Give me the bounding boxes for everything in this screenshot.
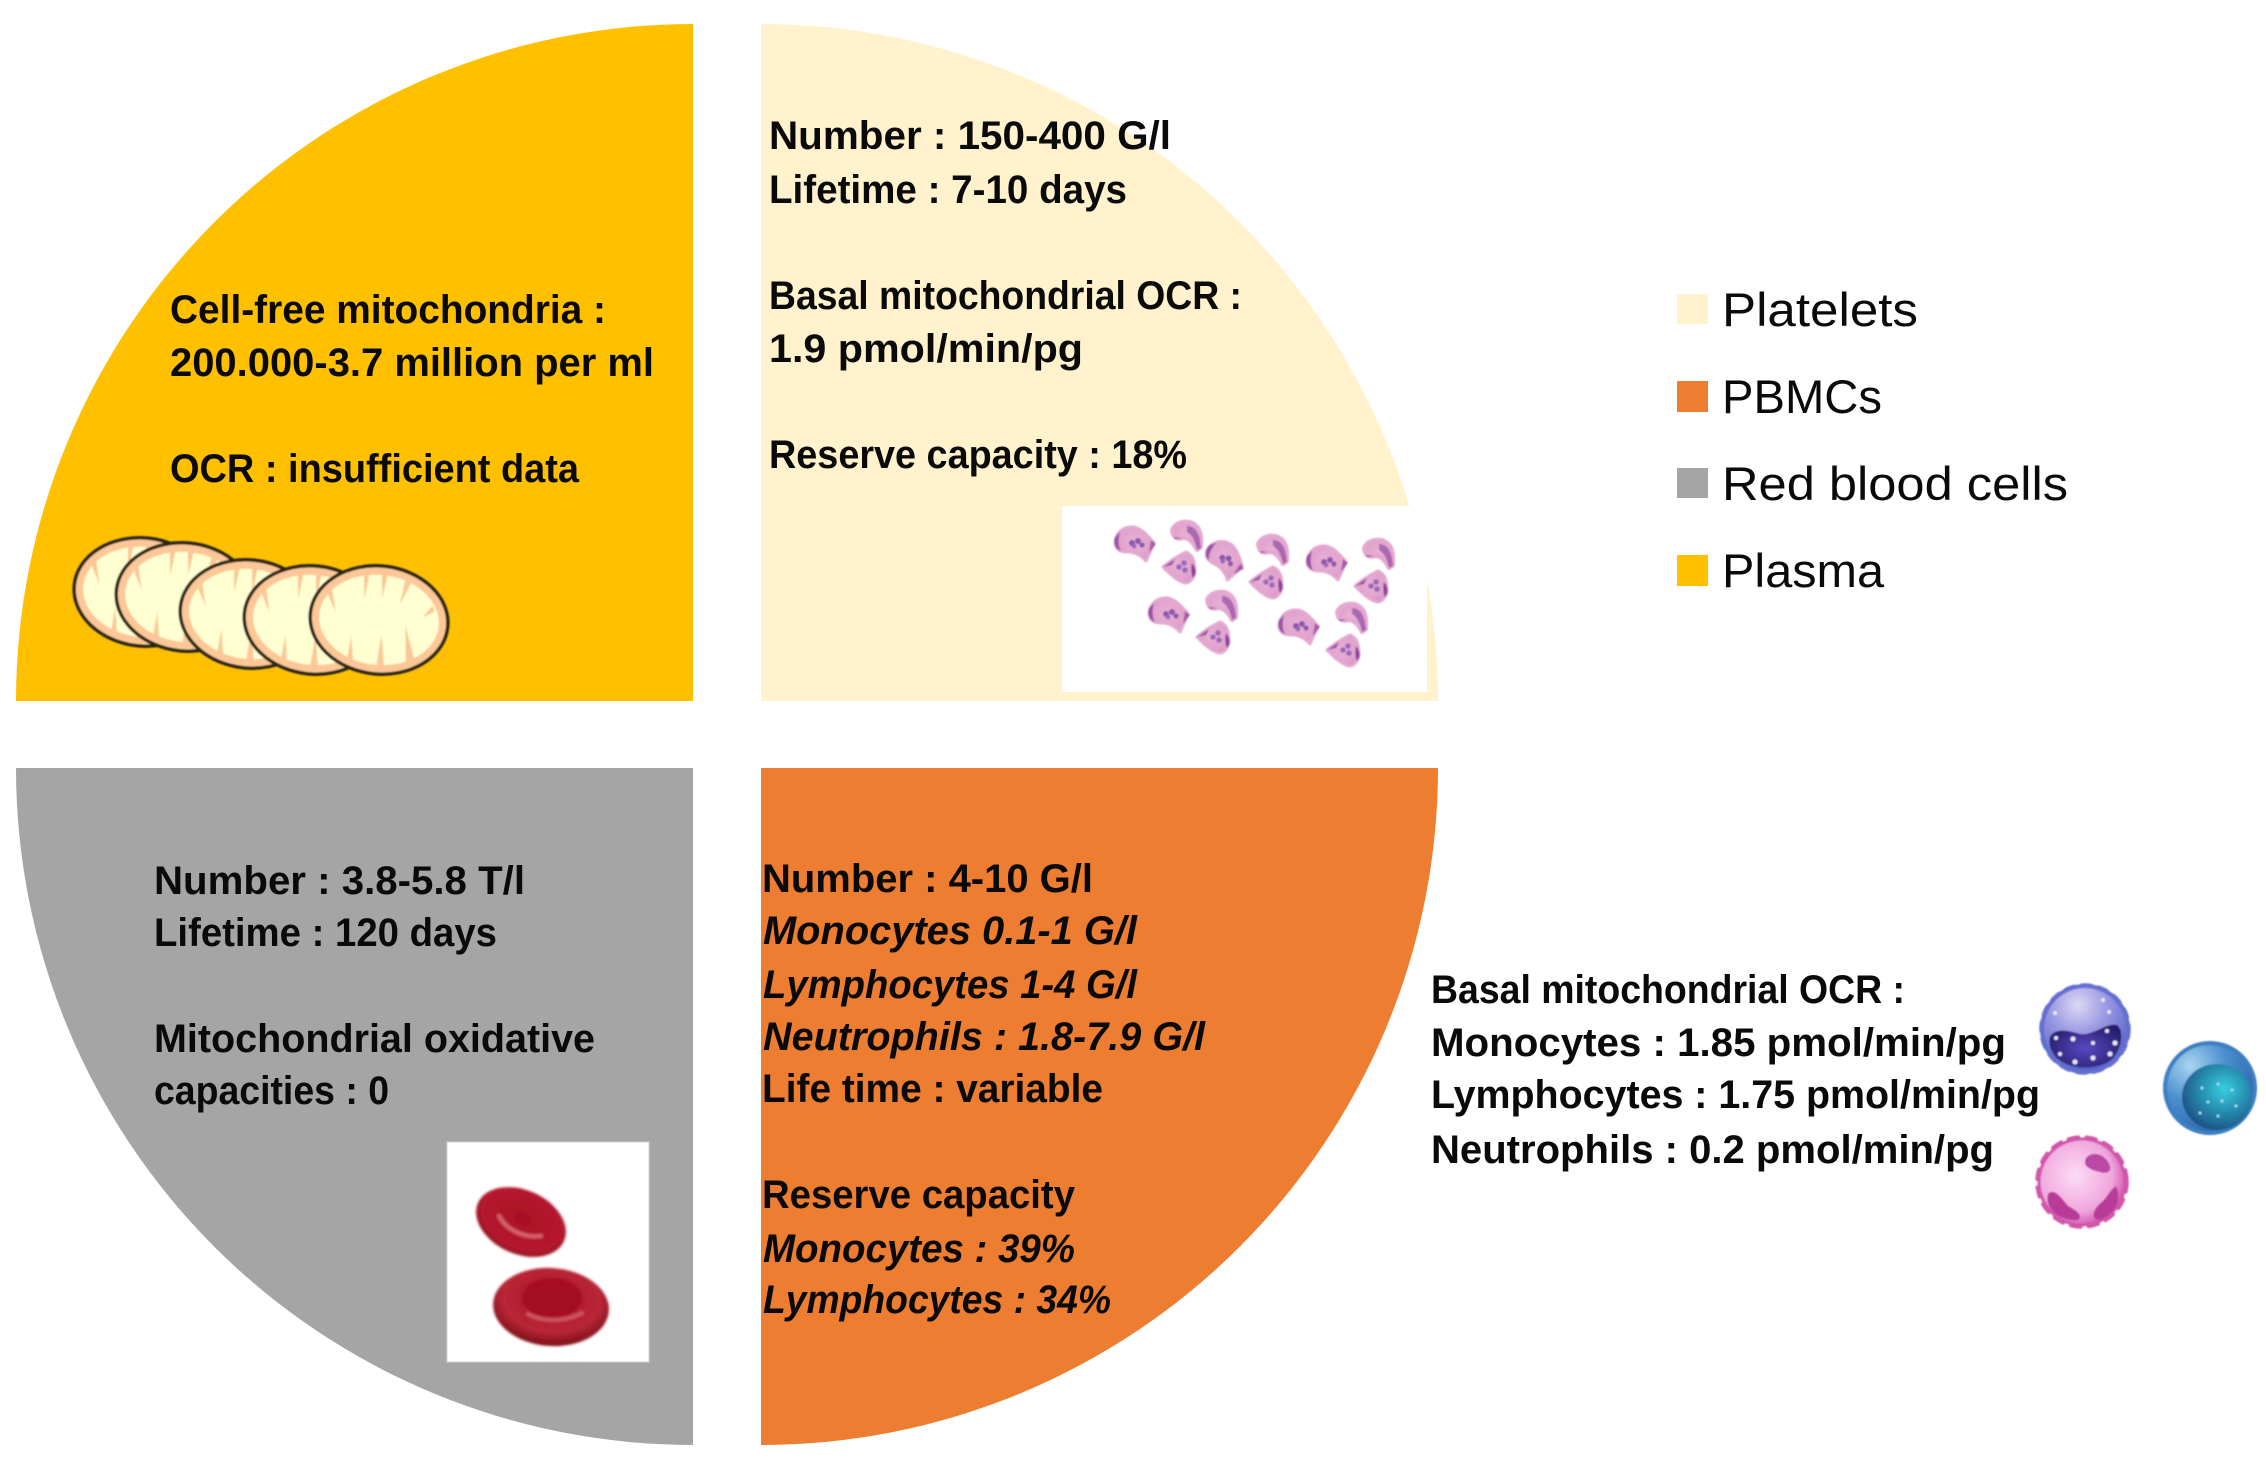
legend item: PBMCs: PBMCs bbox=[1722, 370, 1882, 423]
PBMCs text: Neutrophils : 1.8-7.9 G/l bbox=[763, 1015, 1206, 1059]
panel: PBMCs quadrant bbox=[761, 768, 1438, 1445]
red blood cells text bbox=[154, 859, 595, 1113]
icon: red blood cells picture bbox=[447, 1142, 649, 1362]
panel: plasma quadrant bbox=[16, 24, 693, 701]
callout: PBMC basal OCR text: Lymphocytes : 1.75 pmol/min/pg bbox=[1431, 1073, 2040, 1117]
icon: monocyte bbox=[2041, 985, 2129, 1073]
PBMCs text: Lymphocytes 1-4 G/l bbox=[763, 963, 1138, 1007]
platelets text: Reserve capacity : 18% bbox=[769, 433, 1187, 477]
legend item: plasma: Plasma bbox=[1722, 544, 1885, 597]
icon: platelets picture bbox=[1062, 506, 1427, 692]
plasma quarter disc bbox=[16, 24, 693, 701]
platelets text: Basal mitochondrial OCR : bbox=[769, 274, 1242, 318]
red blood cells text: Mitochondrial oxidative bbox=[154, 1017, 595, 1061]
PBMCs text: Reserve capacity bbox=[762, 1173, 1076, 1217]
platelets text: Number : 150-400 G/l bbox=[769, 114, 1171, 158]
legend item: platelets: Platelets bbox=[1722, 283, 1918, 336]
PBMCs quarter disc bbox=[761, 768, 1438, 1445]
plasma text: Cell-free mitochondria : bbox=[170, 288, 606, 332]
legend bbox=[1677, 283, 2068, 597]
red blood cells quarter disc bbox=[16, 768, 693, 1445]
red blood cells text: Number : 3.8-5.8 T/l bbox=[154, 859, 525, 903]
platelets text bbox=[769, 114, 1242, 477]
panel: red blood cells quadrant bbox=[16, 768, 693, 1445]
panel: platelets quadrant bbox=[761, 24, 1438, 701]
callout: PBMC basal OCR text: Neutrophils : 0.2 pmol/min/pg bbox=[1431, 1128, 1994, 1172]
platelets quarter disc bbox=[761, 24, 1438, 701]
callout: PBMC basal OCR text: Monocytes : 1.85 pmol/min/pg bbox=[1431, 1021, 2006, 1065]
PBMCs text: Life time : variable bbox=[762, 1067, 1103, 1111]
plasma text: 200.000-3.7 million per ml bbox=[170, 341, 654, 385]
legend item: red blood cells: Red blood cells bbox=[1722, 457, 2068, 510]
PBMCs text: Monocytes : 39% bbox=[763, 1227, 1075, 1271]
icon: lymphocyte bbox=[2165, 1043, 2255, 1133]
red blood cells text: capacities : 0 bbox=[154, 1069, 389, 1113]
icon: neutrophil bbox=[2037, 1137, 2127, 1227]
plasma text bbox=[170, 288, 654, 491]
callout: PBMC basal OCR text bbox=[1431, 968, 2040, 1172]
PBMCs text: Number : 4-10 G/l bbox=[762, 857, 1093, 901]
platelets text: Lifetime : 7-10 days bbox=[769, 168, 1127, 212]
PBMCs text: Monocytes 0.1-1 G/l bbox=[763, 909, 1138, 953]
callout: PBMC basal OCR text: Basal mitochondrial OCR : bbox=[1431, 968, 1905, 1012]
platelets text: 1.9 pmol/min/pg bbox=[769, 327, 1083, 371]
plasma text: OCR : insufficient data bbox=[170, 447, 580, 491]
PBMCs text bbox=[762, 857, 1206, 1322]
red blood cells text: Lifetime : 120 days bbox=[154, 911, 497, 955]
icon: mitochondria row bbox=[69, 531, 453, 681]
PBMCs text: Lymphocytes : 34% bbox=[763, 1278, 1111, 1322]
